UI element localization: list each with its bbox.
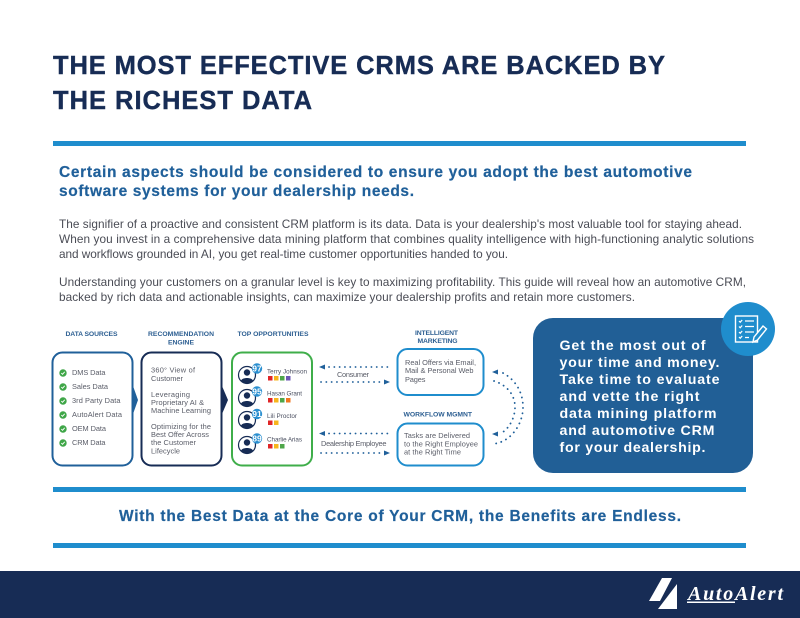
callout text: Get the most out of <box>560 338 706 354</box>
callout text: data mining platform <box>560 406 716 422</box>
marketing text: Real Offers via Email, <box>405 358 476 367</box>
callout text: and vette the right <box>560 389 700 405</box>
heading: recommendation engine <box>148 331 214 346</box>
list: data sources: CRM Data <box>72 438 106 447</box>
customer: Charlie Arias: Charlie Arias <box>267 436 302 444</box>
workflow text: at the Right Time <box>404 448 461 456</box>
customer: Terry Johnson <box>238 363 307 384</box>
heading: workflow mgmnt: WORKFLOW MGMNT <box>404 412 473 418</box>
title <box>53 52 665 115</box>
arrows: feedback loop <box>492 370 523 444</box>
list: data sources: 3rd Party Data <box>72 396 121 405</box>
intro paragraph: The signifier of a proactive and consistent CRM platform is its data. Data is your dealership's most valuable tool for staying ahead. <box>59 217 742 231</box>
heading: intelligent marketing: INTELLIGENT <box>415 330 459 337</box>
footer band <box>0 571 800 618</box>
logo: AutoAlert: AutoAlert <box>686 583 784 605</box>
marketing text <box>405 358 476 384</box>
title: THE MOST EFFECTIVE CRMS ARE BACKED BY <box>53 52 665 80</box>
arrows: dealership employee <box>319 431 390 456</box>
intro paragraph: When you invest in a comprehensive data mining platform that combines quality intelligence with high-functioning analytic solutions <box>59 232 754 246</box>
engine text: 360° View of <box>151 366 196 374</box>
intro paragraph <box>59 217 754 261</box>
customer: Charlie Arias: 89 <box>252 434 262 444</box>
arrows: consumer: Consumer <box>337 370 370 379</box>
engine text: Customer <box>151 374 184 383</box>
arrow: engine to opportunities <box>222 386 228 414</box>
second paragraph <box>59 275 746 304</box>
list: data sources: DMS Data <box>72 368 106 377</box>
arrow: sources to engine <box>133 386 138 414</box>
subheading: Certain aspects should be considered to ensure you adopt the best automotive <box>59 164 692 181</box>
engine text: the Customer <box>151 438 197 447</box>
arrows: consumer <box>319 364 390 384</box>
customer: Terry Johnson: Terry Johnson <box>267 368 307 376</box>
customer: Lili Proctor: 91 <box>252 409 262 419</box>
engine text: Lifecycle <box>151 446 180 456</box>
heading: intelligent marketing: MARKETING <box>418 338 458 345</box>
heading: intelligent marketing <box>415 330 459 345</box>
callout text: Take time to evaluate <box>560 372 720 388</box>
icon: checklist <box>721 302 775 356</box>
engine text: Proprietary AI & <box>151 398 204 407</box>
heading: recommendation engine: ENGINE <box>168 340 194 346</box>
heading: top opportunities: TOP OPPORTUNITIES <box>238 331 309 338</box>
benefits statement: With the Best Data at the Core of Your CRM, the Benefits are Endless. <box>119 508 681 525</box>
callout text: and automotive CRM <box>560 423 714 439</box>
customer: Hasan Grant: Hasan Grant <box>267 390 302 398</box>
second paragraph: Understanding your customers on a granular level is key to maximizing profitability. This guide will reveal how an automotive CRM, <box>59 275 746 289</box>
logo: AutoAlert <box>649 578 784 609</box>
callout text: your time and money. <box>560 355 720 371</box>
customer: Lili Proctor <box>238 409 297 429</box>
engine text: Leveraging <box>151 390 190 399</box>
intro paragraph: and workflows grounded in AI, you get real-time customer opportunities handed to you. <box>59 247 508 261</box>
heading: recommendation engine: RECOMMENDATION <box>148 331 214 338</box>
customer: Hasan Grant: 95 <box>252 386 262 396</box>
marketing text: Mail & Personal Web <box>405 366 474 375</box>
workflow text: Tasks are Delivered <box>404 431 470 440</box>
arrows: dealership employee: Dealership Employee <box>321 439 386 448</box>
workflow text <box>404 431 478 456</box>
panel: workflow management <box>398 412 484 466</box>
engine text: Optimizing for the <box>151 422 211 431</box>
customer: Charlie Arias <box>238 433 302 454</box>
second paragraph: backed by rich data and actionable insights, can maximize your dealership profits and retain more customers. <box>59 290 635 304</box>
subheading: software systems for your dealership needs. <box>59 183 414 200</box>
subheading <box>59 164 692 200</box>
customer: Lili Proctor: Lili Proctor <box>267 413 297 420</box>
engine text: Best Offer Across <box>151 430 209 439</box>
callout text: for your dealership. <box>560 440 706 456</box>
callout <box>533 302 775 473</box>
callout text <box>560 338 720 456</box>
list: data sources: Sales Data <box>72 382 109 391</box>
list: data sources: AutoAlert Data <box>72 410 123 419</box>
list: data sources <box>59 368 123 447</box>
title: THE RICHEST DATA <box>53 87 312 115</box>
customer: Hasan Grant <box>238 386 302 407</box>
panel: top opportunities <box>232 331 312 466</box>
panel: recommendation engine <box>142 331 222 466</box>
customer: Terry Johnson: 97 <box>252 364 262 374</box>
panel: intelligent marketing <box>398 330 484 395</box>
workflow text: to the Right Employee <box>404 440 478 448</box>
engine text: Machine Learning <box>151 406 211 415</box>
list: data sources: OEM Data <box>72 424 107 433</box>
engine text <box>151 366 211 456</box>
panel: data sources <box>52 331 132 466</box>
heading: data sources: DATA SOURCES <box>66 331 118 338</box>
marketing text: Pages <box>405 375 426 384</box>
